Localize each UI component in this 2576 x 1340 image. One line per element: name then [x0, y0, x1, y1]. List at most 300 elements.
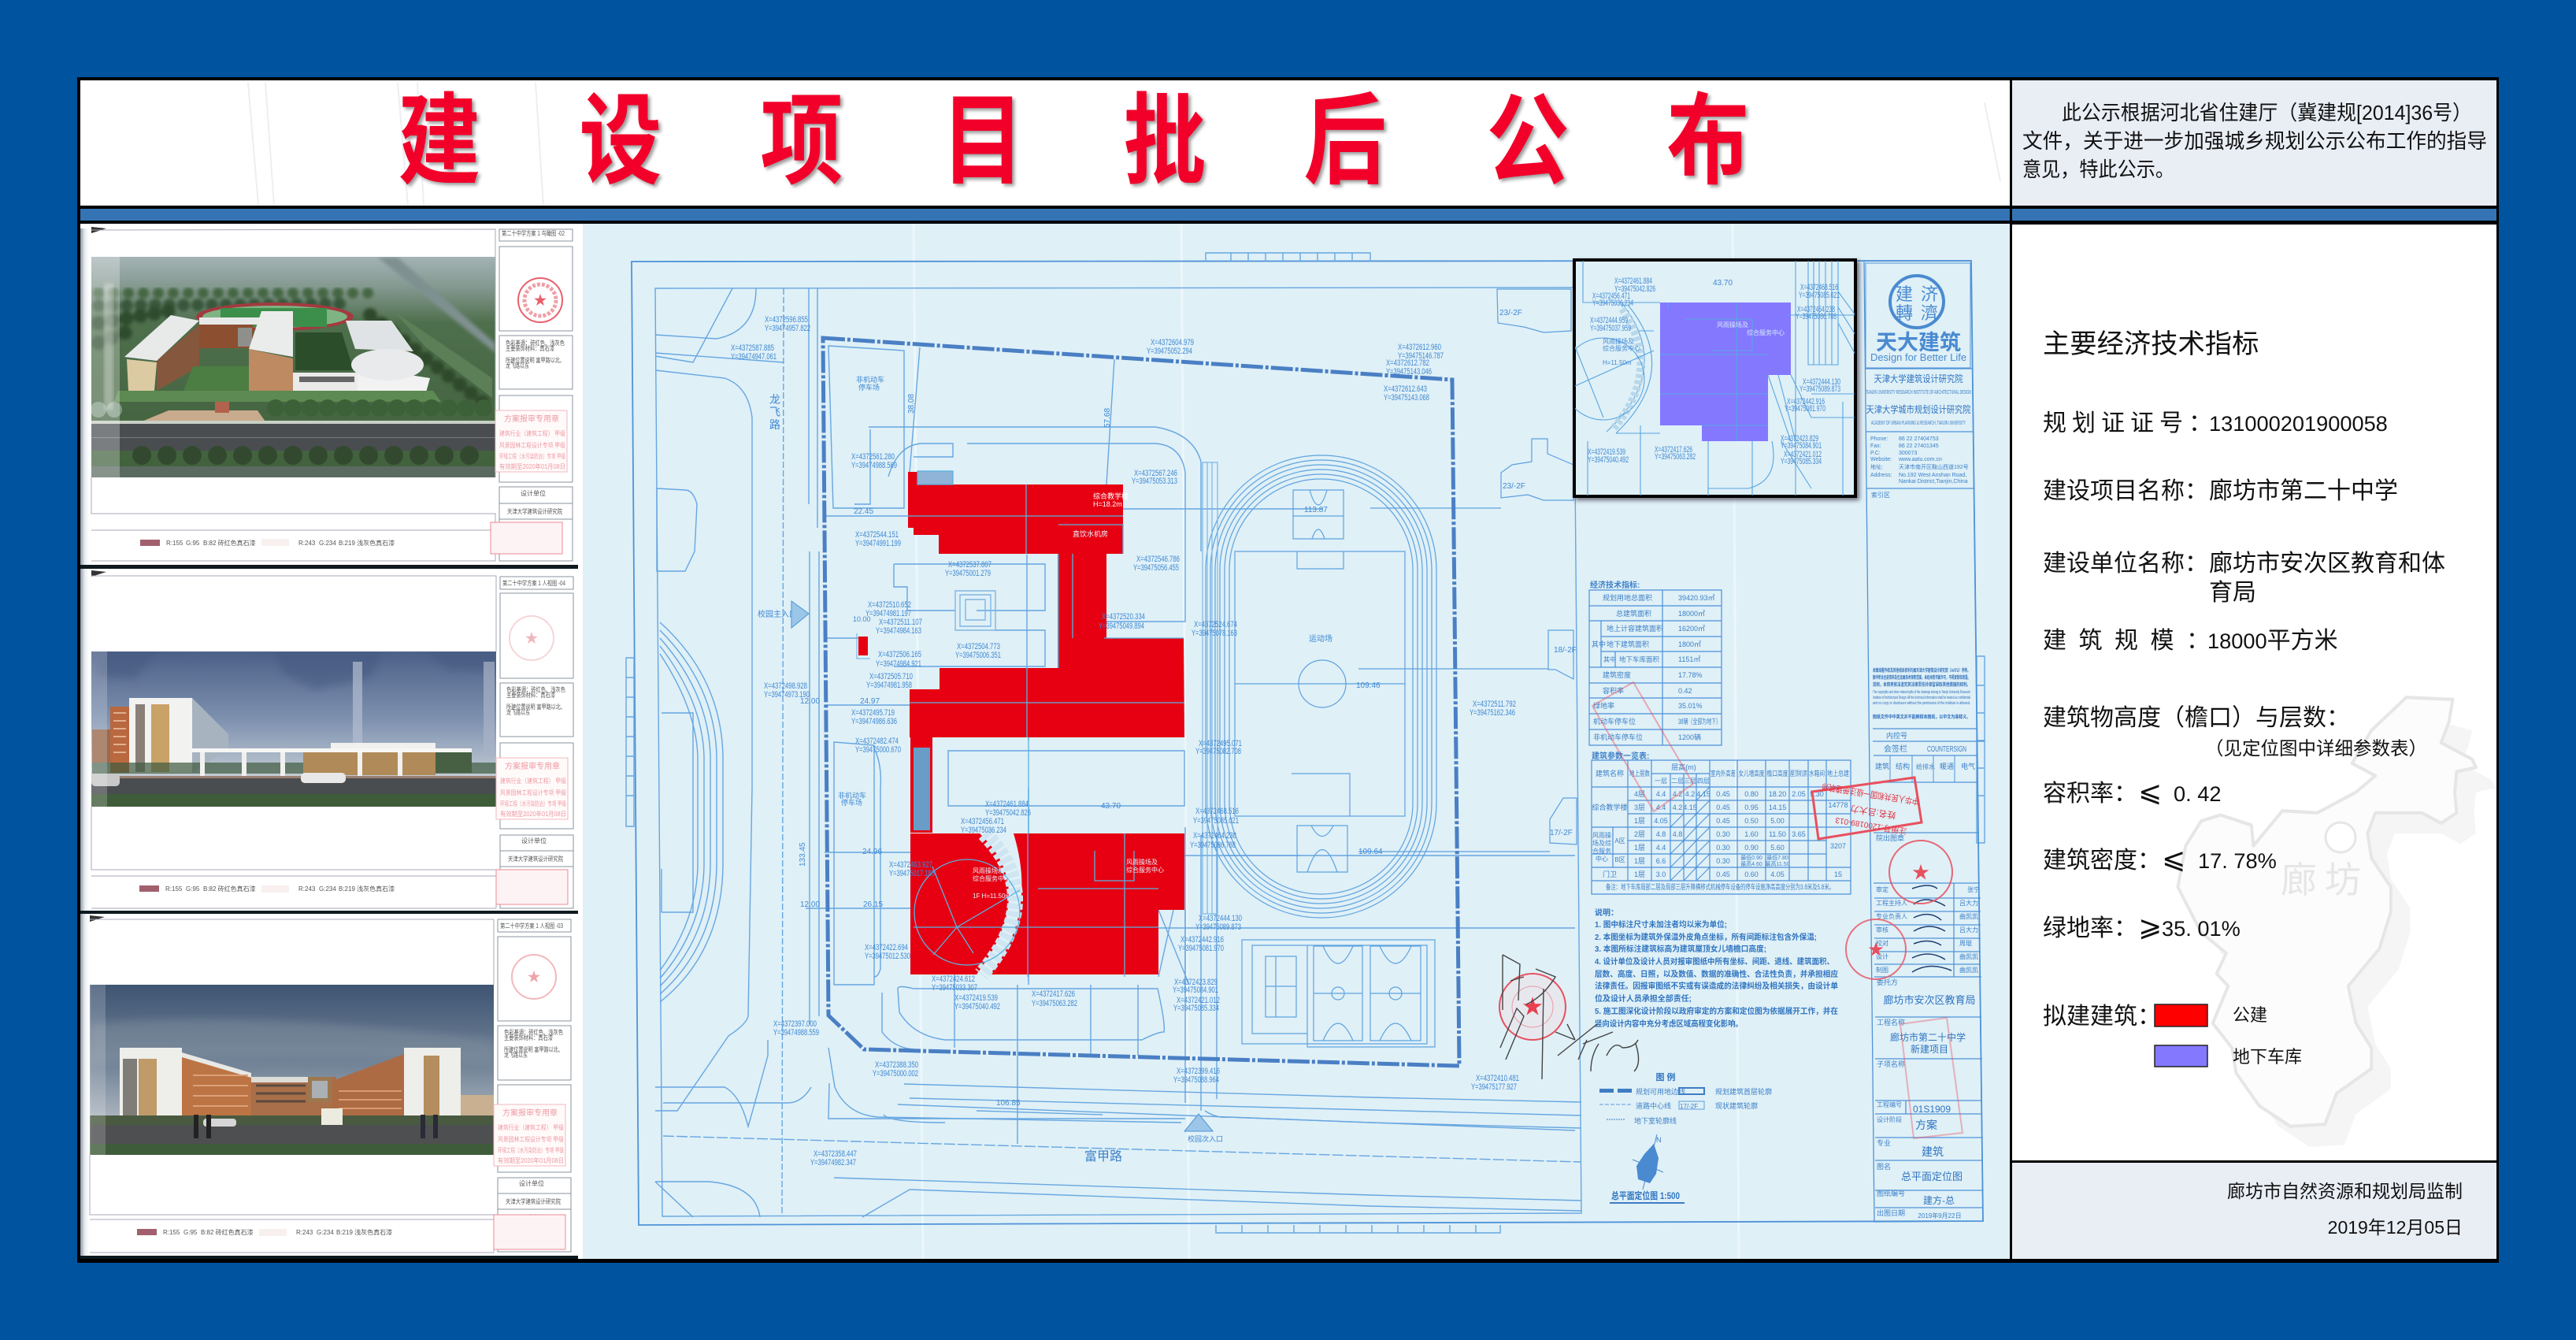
plan legend: 规划可用地边线: [1636, 1087, 1685, 1096]
title: 建设项目批后公布: 建: [398, 86, 480, 197]
running track: [1203, 455, 1436, 1047]
title block: 子项名称: [1877, 1060, 1905, 1068]
building parameters table: 1层: [1634, 857, 1645, 865]
coordinate labels: Y=39474986.636: [851, 717, 897, 726]
building parameters table: 3层: [1634, 804, 1645, 811]
design institute logo: 轉: [1896, 303, 1913, 323]
rendering sheet 1: aerial view: 建筑行业（建筑工程） 甲级: [499, 429, 565, 437]
neighbouring buildings: [1358, 289, 1577, 852]
title block: P.C:: [1870, 451, 1881, 456]
building parameters table: 4.05: [1654, 817, 1668, 825]
economic indicators table: 地下车库面积: [1619, 655, 1660, 663]
rendering sheet 3: front view: 所建位置说明 富甲路以北、: [504, 1045, 563, 1053]
road and entrance labels: 133.45: [799, 842, 807, 867]
rendering sheet 2: street view: 风景园林工程设计专项 甲级: [500, 789, 566, 796]
rendering sheet 1: aerial view: 第二十中学方案 1 鸟瞰图 -02: [502, 229, 565, 237]
vertical divider repaint: [2010, 80, 2012, 1259]
coordinate labels: X=4372561.280: [851, 452, 895, 462]
drawing frames and roads: [626, 253, 1985, 1233]
inset: underground garage plan: [1562, 260, 1855, 496]
building parameters table: 6.6: [1656, 857, 1666, 865]
proposed public buildings: H=18.2m: [1093, 500, 1122, 508]
building parameters table: 3.65: [1792, 830, 1806, 838]
economic indicators table: 地上计容建筑面积: [1607, 624, 1663, 633]
coordinate labels: X=4372596.855: [765, 315, 808, 325]
road and entrance labels: 57.68: [1103, 408, 1112, 428]
building density: ⩽: [2162, 843, 2185, 875]
inset: underground garage plan: X=4372442.916: [1787, 397, 1825, 406]
title block: 审定: [1876, 885, 1888, 893]
building parameters table: 0.80: [1744, 790, 1759, 798]
approval stamps: [1499, 682, 1963, 1138]
coordinate labels: Y=39475033.307: [932, 983, 977, 993]
coordinate labels: Y=39475042.826: [985, 808, 1031, 818]
inset: underground garage plan: 风雨操场及: [1717, 321, 1748, 329]
coordinate labels: Y=39474982.347: [810, 1158, 856, 1167]
rendering sheet 1: aerial view: 环境工程（水污染防治）专项 甲级: [499, 452, 565, 460]
panel: renderings column: [80, 224, 583, 1259]
design notes: 5. 施工图深化设计阶段以政府审定的方案和定位图为依据展开工作，并在: [1595, 1006, 1838, 1016]
road and entrance labels: 10.00: [853, 615, 871, 623]
rendering sheet 1: aerial view: 方案报审专用章: [504, 414, 559, 424]
north arrow and drawing title: [1610, 1134, 1685, 1204]
coordinate labels: X=4372505.710: [869, 672, 913, 681]
approval stamps: 姓名:吕大力: [1850, 804, 1896, 822]
coordinate labels: X=4372399.416: [1177, 1067, 1220, 1076]
proposed public buildings: [908, 471, 1184, 977]
economic indicators table: 容积率: [1603, 686, 1624, 695]
coordinate labels: [731, 315, 1519, 1167]
title block: 会签栏: [1884, 744, 1907, 754]
coordinate labels: Y=39474973.190: [764, 690, 810, 700]
economic indicators table: 地下建筑面积: [1607, 640, 1649, 648]
building parameters table: 0.50: [1744, 817, 1759, 825]
coordinate labels: X=4372410.481: [1476, 1074, 1519, 1083]
building parameters table: 水箱间: [1809, 769, 1825, 778]
coordinate labels: X=4372461.884: [985, 800, 1029, 809]
underground garage footprint: [1660, 303, 1791, 441]
rendering sheet 1: aerial view: G:95: [186, 540, 200, 547]
coordinate labels: Y=39475085.021: [1193, 816, 1239, 826]
title block: Address:: [1870, 473, 1892, 478]
road and entrance labels: 运动场: [1309, 633, 1332, 644]
building detail lines: [908, 471, 1184, 977]
economic indicators table: 17.78%: [1678, 671, 1703, 679]
coordinate labels: X=4372388.350: [875, 1060, 918, 1070]
rendering sheet 1: aerial view: 风景园林工程设计专项 甲级: [499, 441, 565, 449]
coordinate labels: X=4372442.916: [1181, 935, 1224, 945]
building parameters table: 0.45: [1716, 817, 1730, 825]
economic indicators table: 其中: [1592, 640, 1606, 648]
title block: 结构: [1896, 762, 1910, 770]
title block: 曲凯凯: [1959, 952, 1978, 960]
building parameters table: 14778: [1828, 801, 1848, 809]
title block: 周琨: [1959, 940, 1972, 947]
inset: underground garage plan: 43.70: [1713, 279, 1733, 288]
Langfang map watermark: 廊坊: [2281, 859, 2369, 900]
road and entrance labels: 校园次入口: [1188, 1134, 1223, 1143]
coordinate labels: X=4372520.334: [1102, 612, 1145, 622]
rendering sheet 3: front view: 有效期至2020年01月08日: [498, 1156, 564, 1164]
proposed public buildings: 综合服务中心: [1126, 866, 1164, 874]
title block: The copyrights and other related rights of the drawings belong to Tianjin University Research: [1873, 690, 1970, 695]
neighbouring buildings: 18/-2F: [1554, 646, 1577, 655]
coordinate labels: Y=39474981.958: [866, 681, 912, 690]
title: 建设项目批后公布: 设: [580, 86, 662, 197]
coordinate labels: Y=39475085.334: [1173, 1004, 1219, 1013]
neighbouring buildings: 23/-2F: [1503, 482, 1525, 491]
green ratio: ⩾: [2138, 911, 2162, 943]
coordinate labels: Y=39475086.788: [1190, 841, 1236, 850]
coordinate labels: Y=39475017.185: [889, 869, 935, 878]
coordinate labels: X=4372495.719: [851, 708, 895, 718]
title block: Nankai District,Tianjin,China: [1899, 479, 1968, 484]
title block: ACADEMY OF URBAN PLANNING & RESEARCH, TIANJIN UNIVERSITY: [1871, 421, 1966, 426]
economic indicators table: 38辆（全部为地下）: [1678, 717, 1721, 726]
building parameters table: 最低0.90: [1740, 854, 1762, 861]
rendering sheet 1: aerial view: 有效期至2020年01月08日: [499, 462, 565, 470]
inset: underground garage plan: 综合服务中心: [1747, 329, 1785, 336]
design notes: [1595, 908, 1838, 1029]
coordinate labels: X=4372417.626: [1032, 989, 1075, 999]
inset: underground garage plan: Y=39475042.826: [1614, 284, 1655, 294]
building parameters table: 4.4: [1656, 790, 1666, 798]
design notes: 位及设计人员承担全部责任;: [1595, 993, 1692, 1004]
Langfang map watermark: [2178, 697, 2496, 1147]
title block: 建筑: [1875, 762, 1889, 770]
rendering sheet 1: aerial view: 所建位置说明 富甲路以北、: [506, 356, 565, 364]
coordinate labels: X=4372544.151: [855, 530, 899, 540]
rendering sheet 3: front view: ★: [528, 970, 540, 985]
inset: underground garage plan: X=4372444.130: [1803, 377, 1840, 387]
panel: key indicators: [2012, 225, 2496, 1160]
design institute logo: 建: [1896, 284, 1913, 304]
title block: 吕大力: [1959, 926, 1978, 934]
title: 建设项目批后公布: [398, 86, 1749, 197]
coordinate labels: Y=39474988.559: [773, 1028, 819, 1037]
building scale: 建筑规模：: [2043, 628, 2222, 654]
title block: 专业: [1877, 1138, 1891, 1147]
title block: 新建项目: [1911, 1043, 1948, 1055]
approval stamps: ★: [1912, 863, 1929, 882]
title block: 审核: [1876, 926, 1888, 934]
coordinate labels: X=4372504.773: [957, 642, 1000, 651]
road and entrance labels: 富甲路: [1084, 1149, 1122, 1164]
economic indicators table: 16200㎡: [1678, 625, 1705, 633]
divider: [80, 911, 578, 914]
supervising authority: 廊坊市自然资源和规划局监制: [2227, 1181, 2463, 1201]
title block: 专业负责人: [1876, 912, 1907, 920]
rendering sheet 3: front view: R:155: [163, 1229, 180, 1236]
inset: underground garage plan: Y=39475081.970: [1785, 404, 1825, 414]
title block: and no copy or disclosure without the permission of the Institute is allowed.: [1873, 701, 1970, 706]
title block: 图名: [1877, 1162, 1891, 1171]
road and entrance labels: 非机动车: [838, 791, 866, 800]
title block: 制图: [1876, 966, 1888, 974]
road and entrance labels: 109.64: [1358, 848, 1383, 856]
title: 建设项目批后公布: 批: [1124, 86, 1206, 197]
title block: 86 22 27404753: [1899, 436, 1939, 442]
economic indicators table: 1151㎡: [1678, 655, 1700, 663]
rendering sheet 3: front view: 建筑行业（建筑工程） 甲级: [498, 1123, 564, 1131]
building parameters table: 地上总建: [1827, 769, 1849, 778]
notice text: 文件，关于进一步加强城乡规划公示公布工作的指导: [2022, 129, 2487, 153]
inset: underground garage plan: X=4372468.516: [1800, 283, 1838, 292]
coordinate labels: Y=39475036.234: [961, 826, 1006, 835]
rendering sheet 2: street view: 第二十中学方案 1 人视图 -04: [502, 579, 565, 587]
coordinate labels: X=4372612.643: [1384, 384, 1427, 394]
proposed public buildings: 风雨操场及: [1126, 858, 1158, 866]
building parameters table: A区: [1614, 837, 1625, 844]
design institute logo: 天大建筑: [1876, 331, 1961, 354]
road and entrance labels: 24.96: [862, 848, 882, 856]
design notes: 竖向设计内容中充分考虑区域高程变化影响。: [1595, 1019, 1743, 1029]
rendering sheet 2: street view: [80, 569, 573, 911]
building parameters table: 0.45: [1716, 804, 1730, 811]
road and entrance labels: 龙: [769, 393, 780, 406]
title: 建设项目批后公布: 公: [1487, 86, 1569, 197]
inset: underground garage plan: Y=39475037.959: [1590, 324, 1631, 333]
building parameters table: 4.05: [1770, 870, 1785, 878]
building parameters table: 4层: [1634, 790, 1645, 798]
title block: 曲凯凯: [1959, 966, 1978, 974]
road and entrance labels: 38.08: [907, 394, 916, 414]
building parameters table: 3207: [1830, 842, 1846, 850]
title block: 86 22 27401345: [1899, 444, 1939, 449]
road and entrance labels: 109.46: [1356, 681, 1381, 690]
coordinate labels: Y=39475177.927: [1471, 1082, 1517, 1092]
design notes: 2. 本图坐标为建筑外保温外皮角点坐标，所有间距标注包含外保温;: [1595, 932, 1817, 942]
inset: underground garage plan: 综合服务中心: [1603, 344, 1640, 352]
coordinate labels: Y=39475084.901: [1173, 986, 1218, 995]
proposed public buildings: 1F H=11.50m: [973, 893, 1010, 900]
building parameters table: 0.45: [1716, 870, 1730, 878]
title block: 地址:: [1870, 463, 1883, 470]
road and entrance labels: 停车场: [841, 798, 862, 807]
inset: underground garage plan: Y=39475063.282: [1655, 452, 1696, 462]
proposed public buildings: 综合服务中心: [973, 874, 1010, 882]
road and entrance labels: 校园主入口: [758, 609, 797, 619]
building parameters table: B区: [1614, 856, 1625, 863]
building parameters table: 5.60: [1770, 844, 1785, 852]
title block: 委托方: [1877, 978, 1898, 986]
coordinate labels: Y=39475078.163: [1192, 629, 1237, 638]
title block: 图纸文件中中英文并不能解释本图纸，以中文为准释义。: [1873, 714, 1970, 720]
coordinate labels: Y=39475081.970: [1178, 944, 1224, 953]
title block: COUNTERSIGN: [1927, 745, 1966, 754]
planning permit number: 规划证证号：: [2043, 410, 2218, 436]
rendering sheet 3: front view: 审核: [528, 1213, 540, 1221]
road and entrance labels: 43.70: [1101, 802, 1121, 811]
rendering sheet 2: street view: G:234: [319, 885, 336, 893]
economic indicators table: 39420.93㎡: [1678, 594, 1715, 602]
title block: [1864, 261, 1985, 1222]
inset: underground garage plan: X=4372419.539: [1588, 447, 1625, 457]
coordinate labels: Y=39475053.313: [1132, 477, 1177, 486]
inset: underground garage plan: Y=39475085.334: [1781, 457, 1822, 466]
north arrow and drawing title: 总平面定位图 1:500: [1611, 1190, 1680, 1201]
rendering sheet 3: front view: B:82 砖红色真石漆: [201, 1228, 254, 1236]
design notes: 层数、高度、日照，以及数值、数据的准确性、合法性负责，并承担相应: [1595, 969, 1838, 979]
road and entrance labels: 飞: [769, 406, 780, 418]
date: 2019年12月05日: [2328, 1217, 2463, 1238]
coordinate labels: X=4372511.792: [1473, 700, 1516, 709]
design institute logo: Design for Better Life: [1870, 351, 1966, 363]
building parameters table: 4.2: [1673, 790, 1682, 798]
proposed public buildings: 风雨操场及: [973, 867, 1004, 874]
road and entrance labels: 12.00: [800, 697, 820, 706]
neighbouring buildings: 23/-2F: [1499, 309, 1522, 317]
building parameters table: 4.8: [1673, 830, 1682, 838]
title block: 张宁: [1967, 885, 1980, 893]
notice text: [2022, 101, 2487, 181]
title block: No.192 West Anshan Road,: [1899, 473, 1966, 478]
economic indicators table: 建筑密度: [1603, 670, 1631, 679]
neighbouring buildings: 17/-2F: [1550, 829, 1573, 837]
design institute logo: 济: [1921, 284, 1938, 304]
coordinate labels: X=4372506.165: [878, 650, 921, 659]
economic indicators table: [1589, 580, 1722, 745]
title block: 方案: [1915, 1119, 1937, 1131]
building parameters table: 4.2: [1673, 804, 1682, 811]
rendering sheet 1: aerial view: R:243: [298, 540, 316, 547]
economic indicators table: 总建筑面积: [1616, 609, 1651, 618]
title block: 本图纸著作权及其他相关权利均属天津大学建筑设计研究院（AATU）所有。: [1873, 667, 1970, 674]
coordinate labels: X=4372456.471: [961, 817, 1004, 826]
rendering sheet 3: front view: G:95: [183, 1229, 198, 1236]
title block: 天津大学建筑设计研究院: [1874, 373, 1963, 384]
coordinate labels: X=4372537.807: [948, 560, 991, 570]
building parameters table: 综合教学楼: [1592, 803, 1628, 811]
rendering sheet 3: front view: R:243: [296, 1229, 313, 1236]
coordinate labels: X=4372444.130: [1199, 914, 1242, 923]
building parameters table: 2.05: [1792, 790, 1806, 798]
coordinate labels: X=4372424.612: [932, 974, 975, 984]
road and entrance labels: 路: [769, 418, 780, 431]
rendering sheet 1: aerial view: R:155: [166, 540, 183, 547]
inset: underground garage plan: Y=39475036.234: [1592, 299, 1633, 308]
coordinate labels: Y=39474957.822: [765, 324, 810, 333]
rendering sheet 2: street view: 方案报审专用章: [505, 761, 560, 771]
inset: underground garage plan: X=4372421.012: [1784, 450, 1822, 459]
building parameters table: 最低7.80: [1766, 854, 1788, 861]
north arrow and drawing title: N: [1656, 1136, 1662, 1144]
building parameters table: 18.20: [1769, 790, 1786, 798]
title block: 图纸编号: [1877, 1189, 1905, 1197]
title block: 暖通: [1940, 762, 1954, 770]
green ratio: 绿地率：: [2043, 915, 2137, 941]
rendering sheet 1: aerial view: 主要装饰材料：真石漆: [506, 344, 554, 352]
coordinate labels: X=4372524.674: [1194, 620, 1237, 629]
coordinate labels: X=4372604.979: [1151, 338, 1194, 347]
inset: underground garage plan: Y=39475085.021: [1799, 291, 1840, 300]
divider: [80, 1256, 578, 1259]
rendering sheet 1: aerial view: 设计单位: [521, 489, 546, 497]
inset: underground garage plan: Y=39475084.901: [1781, 441, 1822, 451]
coordinate labels: Y=39475000.670: [855, 745, 901, 755]
rendering sheet 2: street view: B:82 砖红色真石漆: [203, 885, 256, 893]
sports field: [1235, 551, 1405, 816]
rendering sheet 3: front view: 主要装饰材料：真石漆: [504, 1034, 553, 1041]
inset: underground garage plan: X=4372456.471: [1592, 291, 1630, 301]
rendering sheet 3: front view: 环境工程（水污染防治）专项 甲级: [498, 1146, 564, 1154]
title block: 校对: [1876, 939, 1888, 947]
coordinate labels: X=4372498.928: [764, 681, 807, 691]
coordinate labels: X=4372567.246: [1134, 469, 1177, 478]
building parameters table: 最高4.60: [1740, 860, 1762, 867]
coordinate labels: X=4372419.539: [954, 993, 998, 1003]
design institute logo: [1870, 276, 1966, 363]
construction unit: 育局: [2209, 580, 2256, 606]
rendering sheet 1: aerial view: 色彩基调：砖红色、浅灰色: [506, 339, 565, 347]
building parameters table: 门卫: [1603, 870, 1617, 878]
design notes: 3. 本图所标注建筑标高为建筑屋顶女儿墙檐口高度;: [1595, 944, 1766, 954]
lower courts: [1242, 940, 1435, 1047]
title block: 出图日期: [1877, 1208, 1905, 1217]
inset: underground garage plan: Y=39475086.788: [1796, 312, 1837, 321]
design notes: 1. 图中标注尺寸未加注者均以米为单位;: [1595, 919, 1727, 930]
coordinate labels: Y=39475082.708: [1195, 747, 1241, 756]
coordinate labels: Y=39475089.873: [1195, 922, 1241, 932]
rendering sheet 3: front view: G:234: [317, 1229, 334, 1236]
building parameters table: 合服务: [1592, 847, 1611, 855]
courtyards: [894, 564, 1184, 806]
coordinate labels: Y=39475049.894: [1099, 622, 1144, 631]
bottom road lines: [663, 1136, 1581, 1162]
economic indicators table: 绿地率: [1593, 701, 1614, 710]
rendering sheet 3: front view: 风景园林工程设计专项 甲级: [498, 1135, 564, 1143]
inset: underground garage plan: Y=39475089.873: [1799, 384, 1840, 394]
economic indicators table: 18000㎡: [1678, 610, 1705, 618]
site boundary: [823, 338, 1459, 1066]
building parameters table: 风雨操: [1592, 831, 1611, 839]
coordinate labels: X=4372463.927: [889, 860, 932, 870]
title block: 工程主持人: [1876, 899, 1907, 907]
rendering sheet 2: street view: ★: [524, 631, 539, 646]
building parameters table: 5.30: [1810, 790, 1824, 798]
building parameters table: 0.95: [1744, 804, 1759, 811]
left road system: [782, 288, 784, 1216]
coordinate labels: Y=39474947.061: [731, 352, 777, 362]
building parameters table: 备注：地下车库局部二层及局部三层升降横移式机械停车设备的停车设施净高高度分别为3.8米及5.8米。: [1606, 882, 1834, 891]
title block: 天津大学城市规划设计研究院: [1866, 403, 1970, 415]
title block: 院出图章: [1876, 833, 1904, 842]
coordinate labels: X=4372421.012: [1177, 996, 1220, 1005]
building parameters table: 4.4: [1656, 844, 1666, 852]
coordinate labels: X=4372495.071: [1199, 739, 1242, 748]
coordinate labels: X=4372422.694: [865, 943, 908, 952]
title block: 总平面定位图: [1901, 1171, 1963, 1182]
coordinate labels: X=4372510.652: [868, 600, 911, 610]
building parameters table: 建筑名称: [1596, 769, 1624, 778]
building parameters table: 场及综: [1592, 839, 1611, 847]
building parameters table: 3.0: [1656, 870, 1666, 878]
building parameters table: 1.60: [1744, 830, 1759, 838]
coordinate labels: X=4372511.107: [879, 618, 922, 627]
rendering sheet 2: street view: 龙飞路以东: [506, 708, 530, 716]
building offset lines: [1158, 856, 1575, 985]
title block: 工程名称: [1877, 1018, 1905, 1026]
title block: 01S1909: [1913, 1104, 1951, 1115]
coordinate labels: Y=39475012.530: [865, 952, 910, 961]
rendering sheet 2: street view: 环境工程（水污染防治）专项 甲级: [500, 800, 566, 807]
coordinate labels: X=4372397.000: [773, 1019, 817, 1029]
rendering sheet 1: aerial view: 龙飞路以东: [506, 362, 529, 369]
title block: 工程编号: [1877, 1101, 1902, 1108]
plan legend: 现状建筑轮廓: [1715, 1101, 1758, 1110]
title block: 曲凯凯: [1959, 912, 1978, 920]
title block: 建方-总: [1923, 1194, 1955, 1206]
